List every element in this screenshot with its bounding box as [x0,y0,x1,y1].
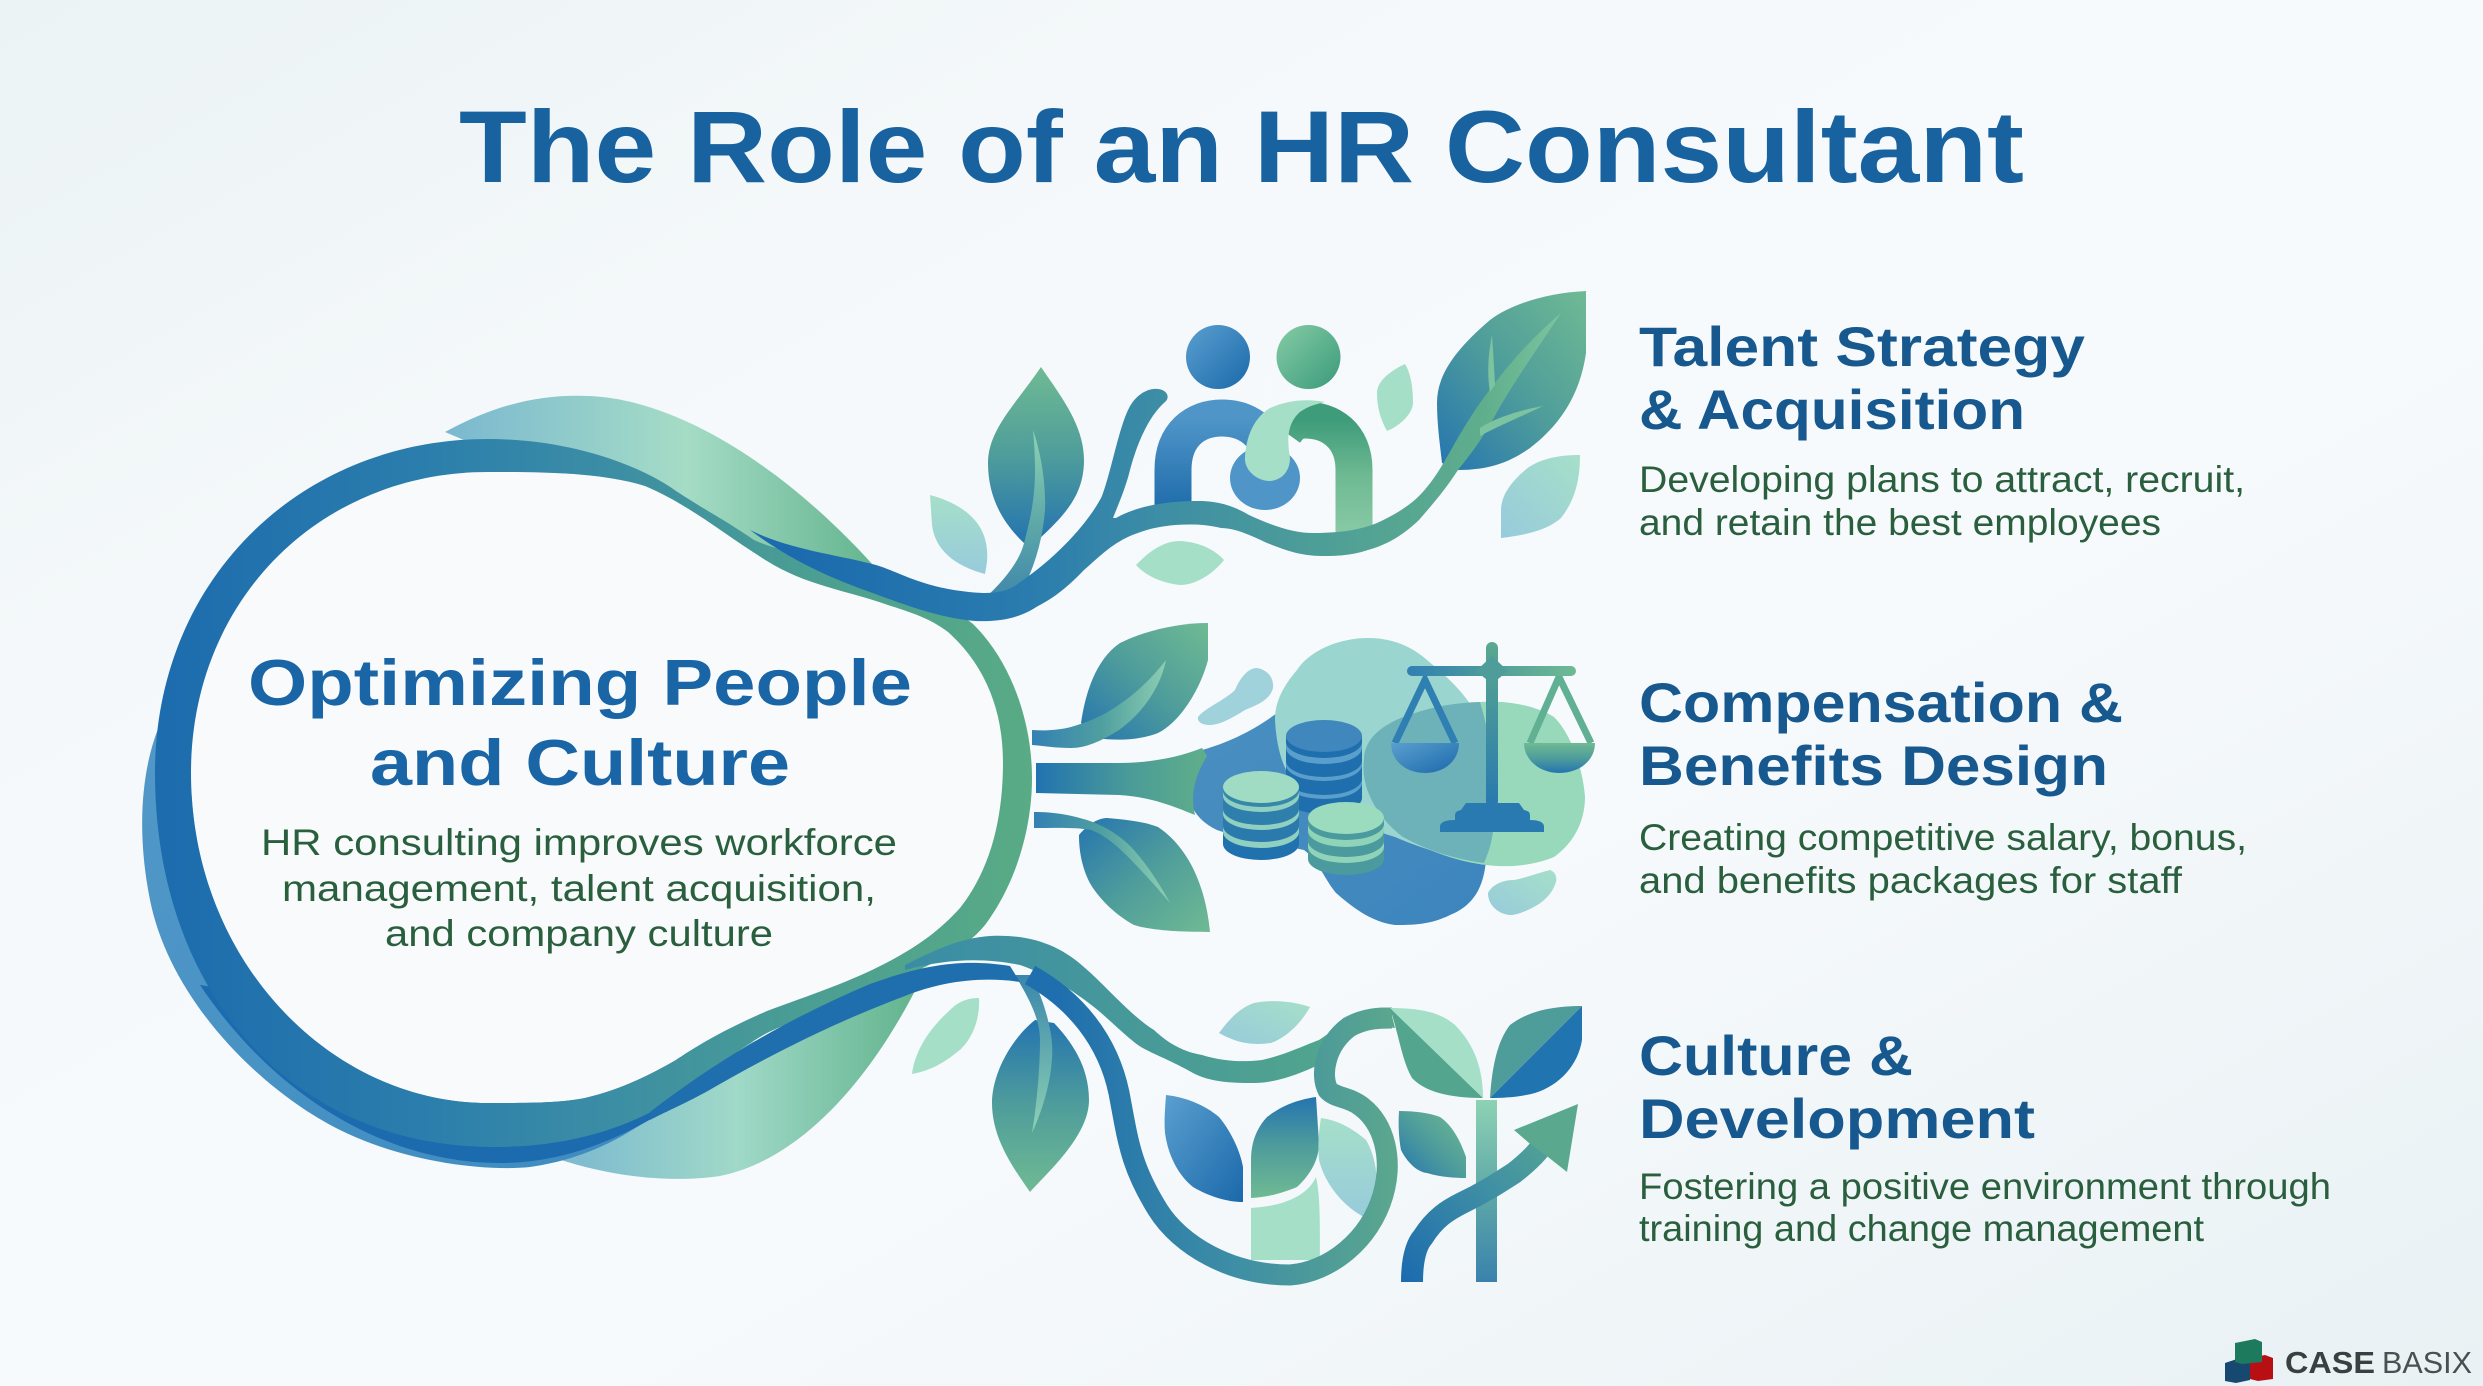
pale leaf near ring [912,998,979,1074]
text: compensation and benefits: and benefits packages for staff [1639,860,2183,901]
sprout left leaf [1390,1008,1483,1098]
logo cubes [2225,1339,2273,1383]
left coin stack [1223,771,1299,860]
text: culture and development: Culture & [1639,1024,1913,1087]
mixed leaf [1251,1097,1319,1198]
pale leaf top [1219,1001,1310,1044]
panel: central ring [142,396,1032,1179]
pale leaf below ring [555,985,918,1179]
text: talent strategy: & Acquisition [1639,378,2025,441]
text: talent strategy [1639,315,2245,543]
main bottom vine [905,936,1395,1083]
pale right leaf [1501,455,1580,538]
blue strand [650,963,1020,1120]
small leaf left [930,495,987,574]
text: talent strategy: and retain the best employees [1639,502,2161,543]
trunk [1036,748,1207,815]
center heading: and Culture [370,726,790,799]
center heading [248,646,912,799]
center description: HR consulting improves workforce [261,822,897,863]
ring main band [155,439,1032,1147]
icon: talent vine with people [750,291,1586,621]
center description: management, talent acquisition, [282,868,876,909]
logo: casebasix [2225,1339,2472,1383]
person right [1245,325,1354,535]
top branch leaf [1081,623,1208,740]
text: culture and development: Development [1639,1087,2035,1150]
pale leaf above ring [445,396,882,575]
mint stem [1251,1177,1320,1260]
icon: compensation coins and scales [1032,623,1595,932]
text: culture and development: training and change management [1639,1208,2205,1249]
right coin stack [1308,802,1384,875]
small leaf below vine [1136,541,1224,585]
small right leaves [1377,364,1413,431]
ring light crescent [142,729,650,1168]
small sprout leaf [1399,1111,1466,1178]
text: talent strategy: Talent Strategy [1639,315,2085,378]
leaf veins [1480,335,1543,436]
blue leaf [1165,1095,1243,1202]
bottom branch stem [1034,812,1170,903]
logo wordmark light: BASIX [2382,1345,2472,1380]
text: compensation and benefits: Compensation & [1639,671,2123,734]
ring dark band [200,985,700,1163]
droplets [1198,668,1273,725]
pale inner leaf [1318,1118,1377,1218]
back coin stack [1286,720,1362,814]
green blob [1363,702,1585,866]
text: talent strategy: Developing plans to attract, recruit, [1639,459,2245,500]
large left leaf [988,367,1084,543]
hanging leaf stem [1015,975,1052,1133]
center heading: Optimizing People [248,646,912,719]
growth arrow [1412,1104,1578,1282]
top branch stem [1032,660,1166,748]
logo wordmark: CASE [2285,1345,2375,1380]
leaf stem [985,430,1045,612]
looping vine [1030,975,1392,1275]
text: compensation and benefits [1639,671,2247,901]
big right leaf [1437,291,1586,470]
hanging leaf [992,1020,1089,1192]
sprout right leaf [1490,1006,1582,1098]
center description [261,822,897,954]
center description: and company culture [385,913,773,954]
ring interior [191,472,1003,1103]
balance scales [1391,642,1595,832]
vine stem [750,313,1561,621]
blue blob [1186,710,1486,925]
sprout stem [1476,1100,1497,1282]
icon: culture vine, sprouts and arrow [650,936,1582,1282]
teal blob [1275,638,1495,863]
text: compensation and benefits: Benefits Design [1639,734,2108,797]
blob overlap [1363,702,1494,863]
person left [1173,325,1300,510]
title: The Role of an HR Consultant [459,90,2024,204]
text: culture and development [1639,1024,2331,1249]
text: compensation and benefits: Creating competitive salary, bonus, [1639,817,2247,858]
text: culture and development: Fostering a positive environment through [1639,1166,2331,1207]
droplet lower [1488,870,1556,915]
bottom branch leaf [1079,818,1210,932]
